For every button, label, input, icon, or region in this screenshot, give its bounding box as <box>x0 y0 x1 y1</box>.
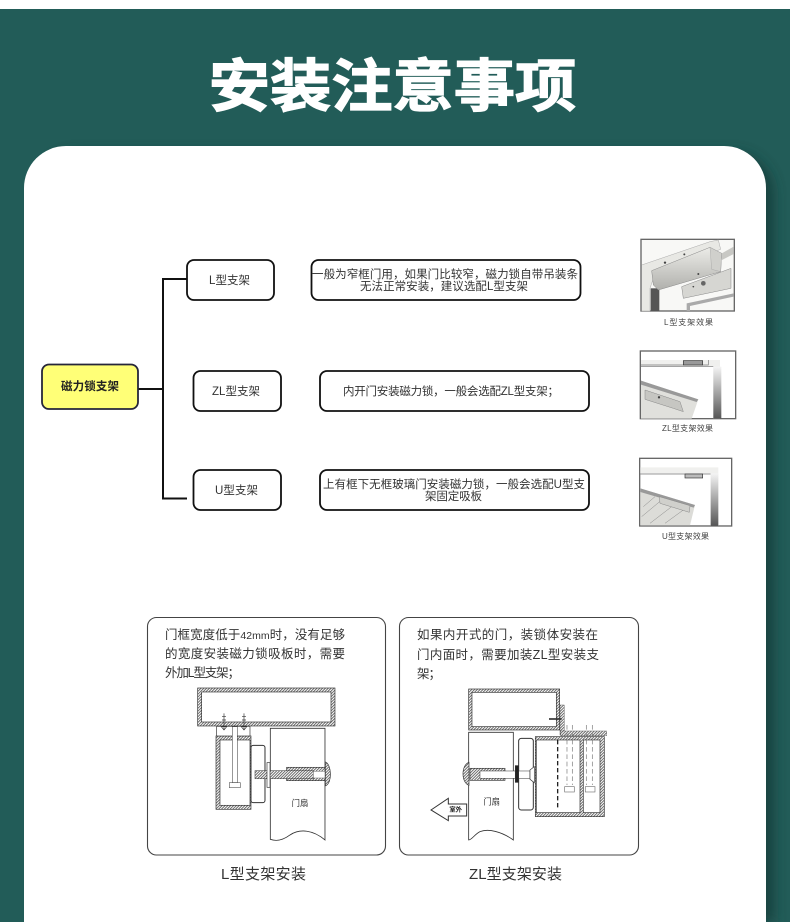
description: U bracket <box>320 470 589 510</box>
instruction text: ZL bracket: 如果内开式的门，装锁体安装在 <box>417 627 598 642</box>
photo: U bracket effect <box>640 458 732 526</box>
card shadow <box>36 152 774 922</box>
label: door leaf: 门扇 <box>292 798 308 808</box>
diagram: ZL bracket section <box>431 689 607 840</box>
description: L bracket: 无法正常安装，建议选配L型支架 <box>360 279 528 293</box>
ZL bracket arm <box>549 705 607 736</box>
caption: U bracket effect: U型支架效果 <box>662 531 709 541</box>
panel: L bracket installation <box>148 618 386 855</box>
node: L bracket: L型支架 <box>209 273 250 287</box>
instruction text: L bracket <box>165 627 345 680</box>
caption: L bracket effect: L型支架效果 <box>664 317 713 327</box>
title: 安装注意事项 <box>209 41 576 123</box>
instruction text: ZL bracket: 架； <box>417 667 441 681</box>
bracket box <box>535 737 604 817</box>
instruction text: L bracket: 的宽度安装磁力锁吸板时，需要 <box>165 646 345 661</box>
mounting screws <box>221 713 247 730</box>
description: L bracket <box>312 260 580 300</box>
magnetic plate <box>519 738 533 810</box>
panel: ZL bracket installation <box>400 618 638 855</box>
L bracket body <box>216 726 251 809</box>
diagram: L bracket section <box>198 688 335 840</box>
description: ZL bracket <box>320 371 589 411</box>
node: L bracket <box>187 260 274 300</box>
label: door leaf: 门扇 <box>483 796 500 806</box>
instruction text: L bracket: 门框宽度低于42mm时，没有足够 <box>165 627 345 642</box>
photo: ZL bracket effect <box>640 351 736 419</box>
door leaf <box>469 732 513 840</box>
panel: white content card <box>24 146 766 922</box>
node: U bracket <box>194 470 281 510</box>
arrow: outdoors: 室外 <box>449 805 463 814</box>
root node <box>42 364 138 409</box>
node: ZL bracket <box>194 371 281 411</box>
flow chart: magnetic lock brackets <box>42 260 589 510</box>
door frame <box>469 689 560 730</box>
hidden screws <box>565 725 595 792</box>
arrow: outdoors <box>431 798 467 821</box>
description: U bracket: 架固定吸板 <box>425 489 482 503</box>
through bolt <box>255 762 330 787</box>
node: U bracket: U型支架 <box>215 483 258 497</box>
instruction text: ZL bracket <box>417 627 599 681</box>
root node: 磁力锁支架 <box>61 379 120 393</box>
caption: ZL bracket effect: ZL型支架效果 <box>662 423 713 433</box>
door frame <box>198 688 335 726</box>
description: L bracket: 一般为窄框门用，如果门比较窄，磁力锁自带吊装条 <box>312 267 578 281</box>
door leaf <box>270 728 325 840</box>
caption: ZL bracket installation: ZL型支架安装 <box>469 866 562 883</box>
caption: L bracket installation: L型支架安装 <box>221 866 306 883</box>
magnetic plate <box>251 745 265 803</box>
description: U bracket: 上有框下无框玻璃门安装磁力锁，一般会选配U型支 <box>323 477 586 491</box>
node: ZL bracket: ZL型支架 <box>212 384 260 398</box>
description: ZL bracket: 内开门安装磁力锁，一般会选配ZL型支架； <box>343 384 559 398</box>
instruction text: ZL bracket: 门内面时，需要加装ZL型安装支 <box>417 647 599 662</box>
instruction text: L bracket: 外加L型支架； <box>165 666 240 680</box>
connector lines <box>138 279 187 498</box>
photo: L bracket effect <box>641 239 734 311</box>
through bolt <box>463 762 534 785</box>
